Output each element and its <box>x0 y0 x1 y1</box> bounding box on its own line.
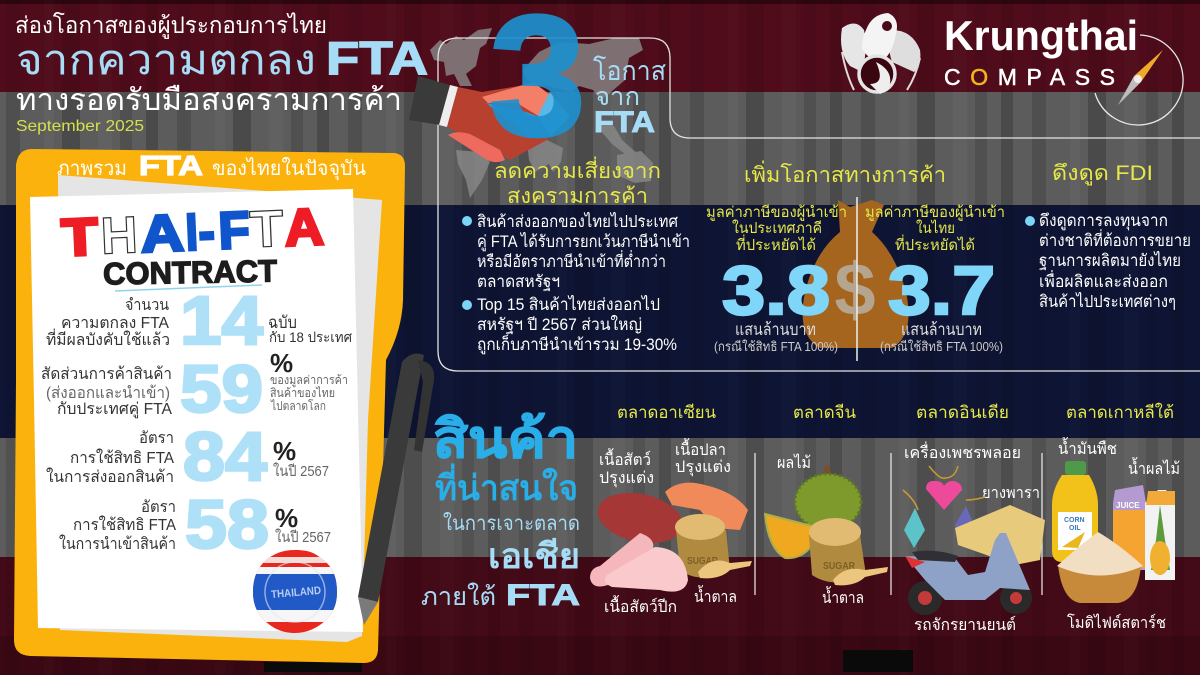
column: attract FDI: สินค้าไปประเทศต่างๆ <box>1039 292 1176 311</box>
panel heading <box>57 150 366 181</box>
contract title <box>61 198 325 292</box>
heading: interesting products for Asia under FTA: ภายใต้ <box>421 582 496 611</box>
stat: 3.8: แสนล้านบาท <box>735 320 816 339</box>
stat: 3.8 <box>706 204 847 354</box>
contract title: H <box>100 206 139 266</box>
icon: rubber sheets <box>955 505 1045 565</box>
stat: 84 percent: % <box>273 436 296 466</box>
market: India: รถจักรยานยนต์ <box>914 615 1016 634</box>
stat: 3.8: ที่ประหยัดได้ <box>736 234 816 254</box>
stat: 14 agreements: กับ 18 ประเทศ <box>269 329 352 345</box>
stat: 3.8: ในประเทศภาคี <box>732 219 822 237</box>
column: increase trade opportunity <box>706 160 1005 361</box>
icon: salmon <box>665 483 748 530</box>
stat: 59 percent: กับประเทศคู่ FTA <box>57 401 172 419</box>
icon: pen <box>358 354 434 625</box>
icon: jewellery <box>903 466 985 548</box>
stat: 59 percent: 59 <box>180 352 263 427</box>
stat: 58 percent: 58 <box>185 486 269 563</box>
stat: 84 percent: ในการส่งออกสินค้า <box>46 467 174 486</box>
market: South Korea: ตลาดเกาหลีใต้ <box>1066 402 1174 422</box>
icon: handshake with big 3 <box>409 0 586 172</box>
stat: 84 percent: อัตรา <box>139 430 174 447</box>
icon: Thailand wax seal: THAILAND <box>271 585 322 601</box>
icon: starch bowl <box>1057 532 1143 603</box>
icon: motorcycle <box>905 533 1032 615</box>
column: reduce trade war risk: ลดความเสี่ยงจาก <box>494 156 661 183</box>
stat: 59 percent: สินค้าของไทย <box>270 386 335 400</box>
column: attract FDI: ดึงดูด FDI <box>1052 162 1153 186</box>
market: ASEAN: ตลาดอาเซียน <box>617 403 716 422</box>
market: India: เครื่องเพชรพลอย <box>904 441 1021 462</box>
icon: sugar sack <box>675 514 752 578</box>
icon: corn oil bottle <box>1052 461 1098 562</box>
stat: 59 percent: (ส่งออกและนำเข้า) <box>46 384 170 402</box>
market: ASEAN: น้ำตาล <box>694 585 737 606</box>
stat: 58 percent: ในปี 2567 <box>275 528 331 546</box>
market: ASEAN: ปรุงแต่ง <box>675 459 731 477</box>
icon: sugar sack: SUGAR <box>687 556 719 567</box>
column: reduce trade war risk <box>462 156 690 355</box>
contract title: A <box>139 204 185 264</box>
column: attract FDI: ดึงดูดการลงทุนจาก <box>1039 212 1168 231</box>
stat: 3.7: มูลค่าภาษีของผู้นำเข้า <box>865 204 1005 221</box>
market: ASEAN: เนื้อสัตว์ปีก <box>604 595 677 616</box>
stat: 3.8: มูลค่าภาษีของผู้นำเข้า <box>706 204 847 221</box>
market: India: ยางพารา <box>982 485 1040 502</box>
stat: 59 percent <box>41 348 348 427</box>
stat: 58 percent: % <box>275 503 298 533</box>
contract title: CONTRACT <box>103 253 277 292</box>
market: ASEAN <box>590 403 752 616</box>
heading: 3 opportunities from FTA: จาก <box>595 83 640 111</box>
heading: interesting products for Asia under FTA: สินค้า <box>433 411 578 469</box>
market: China: น้ำตาล <box>822 586 864 607</box>
stat: 84 percent: 84 <box>183 418 267 495</box>
stat: 14 agreements: จำนวน <box>125 297 169 314</box>
stat: 59 percent: % <box>270 348 293 378</box>
icon: chicken legs <box>590 533 688 592</box>
stat: 3.8: 3.8 <box>722 252 830 329</box>
title: ส่องโอกาสของผู้ประกอบการไทย <box>15 12 327 39</box>
stat: 84 percent: การใช้สิทธิ FTA <box>70 448 174 467</box>
contract title: I <box>184 204 199 262</box>
stat: 59 percent: ไปตลาดโลก <box>270 399 326 413</box>
logo: Krungthai Compass <box>841 12 1183 125</box>
panel heading: ภาพรวม <box>57 158 127 180</box>
title <box>15 12 428 135</box>
stat: 3.7: ในไทย <box>916 219 955 237</box>
heading: interesting products for Asia under FTA: ในการเจาะตลาด <box>443 512 580 535</box>
stat: 3.7: ที่ประหยัดได้ <box>895 234 975 254</box>
column: increase trade opportunity: เพิ่มโอกาสทางการค้า <box>744 160 946 187</box>
contract title: T <box>61 208 99 268</box>
paper sheets <box>30 175 382 642</box>
contract title: F <box>217 201 251 261</box>
stat: 3.7: (กรณีใช้สิทธิ FTA 100%) <box>880 339 1003 354</box>
panel heading: ของไทยในปัจจุบัน <box>212 157 366 181</box>
bullet list: Top 15 สินค้าไทยส่งออกไป <box>477 295 660 314</box>
stat: 84 percent <box>46 418 329 495</box>
panel heading: FTA <box>139 150 203 181</box>
icon: money bag <box>803 200 909 348</box>
icon: juice cartons <box>1113 485 1175 580</box>
contract title: T <box>248 200 285 259</box>
panel: FTA overview clipboard <box>14 149 405 663</box>
heading: 3 opportunities from FTA <box>593 56 666 139</box>
icon: juice cartons: JUICE <box>1116 501 1140 510</box>
icon: sugar sack <box>809 518 888 585</box>
market: ASEAN: เนื้อสัตว์ <box>599 448 651 469</box>
heading: 3 opportunities from FTA: โอกาส <box>593 56 666 86</box>
stat: 3.8: (กรณีใช้สิทธิ FTA 100%) <box>714 339 838 354</box>
logo: Krungthai Compass: C O MPASS <box>944 64 1115 90</box>
title: FTA <box>326 32 428 84</box>
stat: 59 percent: สัดส่วนการค้าสินค้า <box>41 365 172 383</box>
icon: durian <box>765 466 861 558</box>
stat: 14 agreements: ที่มีผลบังคับใช้แล้ว <box>46 328 170 349</box>
contract title: - <box>197 203 216 262</box>
icon: corn oil bottle: CORN <box>1064 517 1085 524</box>
stat: 14 agreements <box>46 282 352 359</box>
title: September 2025 <box>16 118 144 135</box>
bullet list: คู่ FTA ได้รับการยกเว้นภาษีนำเข้า <box>477 232 690 252</box>
market: ASEAN: ปรุงแต่ง <box>599 470 654 488</box>
market: South Korea: โมดิไฟด์สตาร์ช <box>1067 613 1166 632</box>
stat: 59 percent: ของมูลค่าการค้า <box>270 373 348 388</box>
icon: corn oil bottle: OIL <box>1069 525 1081 532</box>
stat: 58 percent: ในการนำเข้าสินค้า <box>59 534 176 553</box>
heading: interesting products for Asia under FTA: ที่น่าสนใจ <box>435 463 578 508</box>
icon: sugar sack: SUGAR <box>823 561 856 572</box>
market: China <box>765 403 888 607</box>
stat: 3.7: แสนล้านบาท <box>901 320 982 339</box>
bullet list: ถูกเก็บภาษีนำเข้ารวม 19-30% <box>477 334 677 355</box>
world map <box>430 28 653 198</box>
market: South Korea: น้ำมันพืช <box>1058 437 1117 458</box>
bullet list: สินค้าส่งออกของไทยไปประเทศ <box>477 212 678 231</box>
icon: compass <box>1095 35 1183 125</box>
logo: Krungthai Compass: Krungthai <box>944 12 1138 59</box>
heading: interesting products for Asia under FTA <box>421 411 580 612</box>
column: attract FDI <box>1025 162 1191 311</box>
stat: 14 agreements: ฉบับ <box>268 313 297 332</box>
column: attract FDI: เพื่อผลิตและส่งออก <box>1039 270 1168 291</box>
title: จากความตกลง <box>16 37 316 83</box>
icon: garuda bird <box>841 13 920 94</box>
market: India: ตลาดอินเดีย <box>916 403 1009 422</box>
market: India <box>903 403 1045 634</box>
title: ทางรอดรับมือสงครามการค้า <box>16 84 402 117</box>
bullet list: หรือมีอัตราภาษีนำเข้าที่ต่ำกว่า <box>477 250 666 271</box>
heading: interesting products for Asia under FTA: FTA <box>506 579 580 612</box>
stat: 14 agreements: 14 <box>180 282 263 359</box>
panel outline: three opportunities <box>438 38 1200 371</box>
stat: 14 agreements: ความตกลง FTA <box>61 315 169 332</box>
stat: 58 percent: อัตรา <box>141 499 176 516</box>
icon: Thailand wax seal <box>253 550 337 633</box>
stat: 84 percent: ในปี 2567 <box>273 462 329 480</box>
market: China: ตลาดจีน <box>793 403 856 422</box>
stat: 3.7 <box>865 204 1005 354</box>
column: reduce trade war risk: สงครามการค้า <box>507 185 648 208</box>
heading: 3 opportunities from FTA: FTA <box>594 106 655 139</box>
stat: 58 percent: การใช้สิทธิ FTA <box>73 515 176 534</box>
market: China: ผลไม้ <box>777 453 811 472</box>
heading: interesting products for Asia under FTA: เอเชีย <box>488 537 580 576</box>
column: attract FDI: ฐานการผลิตมายังไทย <box>1039 251 1181 270</box>
market: South Korea <box>1052 402 1180 632</box>
bullet list <box>462 212 690 355</box>
contract title: A <box>283 198 325 258</box>
icon: red meat <box>593 486 687 550</box>
bullet list: ตลาดสหรัฐฯ <box>477 273 560 291</box>
market: South Korea: น้ำผลไม้ <box>1128 457 1180 478</box>
market: ASEAN: เนื้อปลา <box>675 438 726 459</box>
stat: 58 percent <box>59 486 331 563</box>
stat: 3.7: 3.7 <box>888 252 995 329</box>
bullet list: สหรัฐฯ ปี 2567 ส่วนใหญ่ <box>477 315 642 334</box>
icon: money bag: $ <box>834 248 876 331</box>
